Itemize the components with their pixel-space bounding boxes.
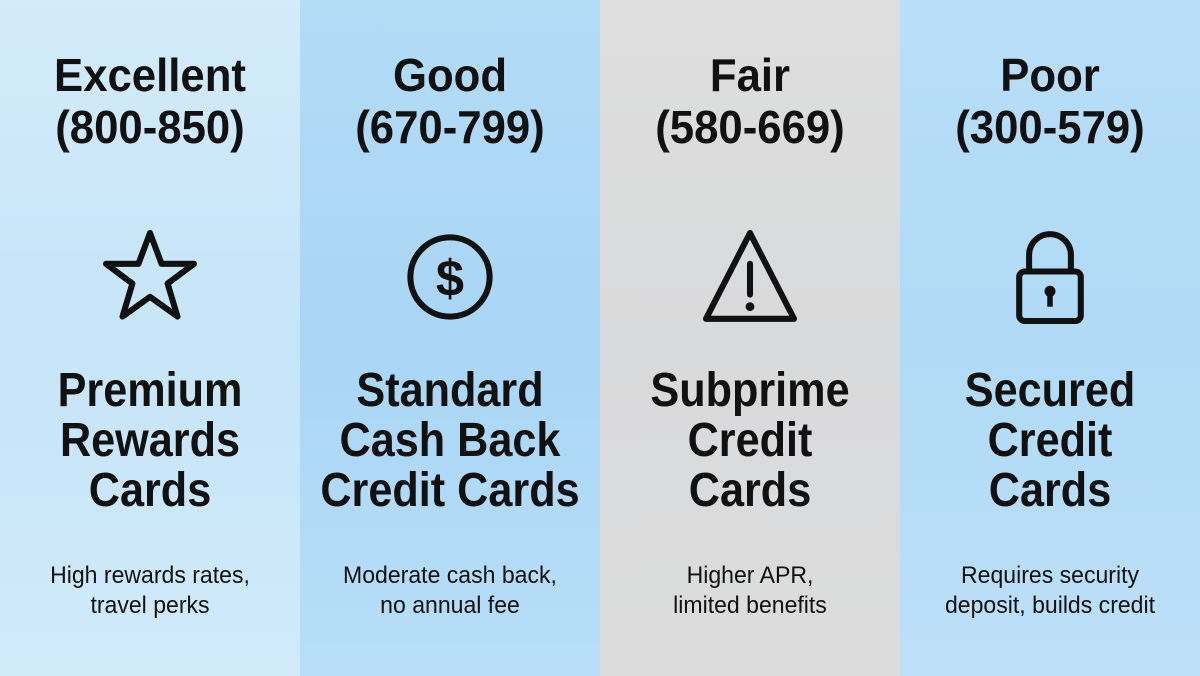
panel: poor [900, 0, 1200, 676]
card type: secured: Cards [989, 464, 1111, 517]
icon: dollar coin [407, 234, 493, 320]
card type: secured [965, 364, 1135, 517]
description: excellent: High rewards rates, [50, 562, 250, 589]
icon: dollar coin: $ [436, 250, 464, 307]
heading: fair range [655, 49, 845, 153]
heading: good range: Good [393, 49, 507, 101]
heading: good range [355, 49, 545, 153]
card type: subprime: Subprime [650, 364, 850, 417]
heading: poor range: Poor [1000, 49, 1100, 101]
card type: standard cash back: Cash Back [340, 414, 560, 467]
heading: excellent range [54, 49, 246, 153]
card type: subprime: Credit [688, 414, 812, 467]
card type: premium rewards: Rewards [60, 414, 240, 467]
card type: premium rewards [58, 364, 242, 517]
description: fair [673, 562, 827, 619]
panel: good [300, 0, 600, 676]
heading: poor range [955, 49, 1145, 153]
panel: fair [600, 0, 900, 676]
heading: fair range: (580-669) [655, 101, 845, 153]
icon: warning triangle [703, 230, 797, 322]
description: poor: deposit, builds credit [945, 592, 1155, 619]
description: good [343, 562, 557, 619]
heading: good range: (670-799) [355, 101, 545, 153]
card type: premium rewards: Cards [89, 464, 211, 517]
description: poor [945, 562, 1155, 619]
card type: standard cash back: Standard [356, 364, 544, 417]
icon: padlock [1016, 231, 1084, 324]
card type: subprime: Cards [689, 464, 811, 517]
card type: standard cash back [320, 364, 580, 517]
card type: premium rewards: Premium [58, 364, 242, 417]
card type: standard cash back: Credit Cards [320, 464, 580, 517]
heading: poor range: (300-579) [955, 101, 1145, 153]
description: fair: Higher APR, [687, 562, 813, 589]
heading: excellent range: Excellent [54, 49, 246, 101]
description: good: Moderate cash back, [343, 562, 557, 589]
card type: secured: Secured [965, 364, 1135, 417]
description: fair: limited benefits [673, 592, 827, 619]
icon: star [103, 230, 197, 320]
card type: secured: Credit [988, 414, 1112, 467]
card type: subprime [650, 364, 850, 517]
description: poor: Requires security [961, 562, 1139, 589]
description: excellent: travel perks [90, 592, 210, 619]
panel: excellent [0, 0, 300, 676]
description: good: no annual fee [380, 592, 520, 619]
heading: fair range: Fair [710, 49, 790, 101]
heading: excellent range: (800-850) [55, 101, 245, 153]
description: excellent [50, 562, 250, 619]
